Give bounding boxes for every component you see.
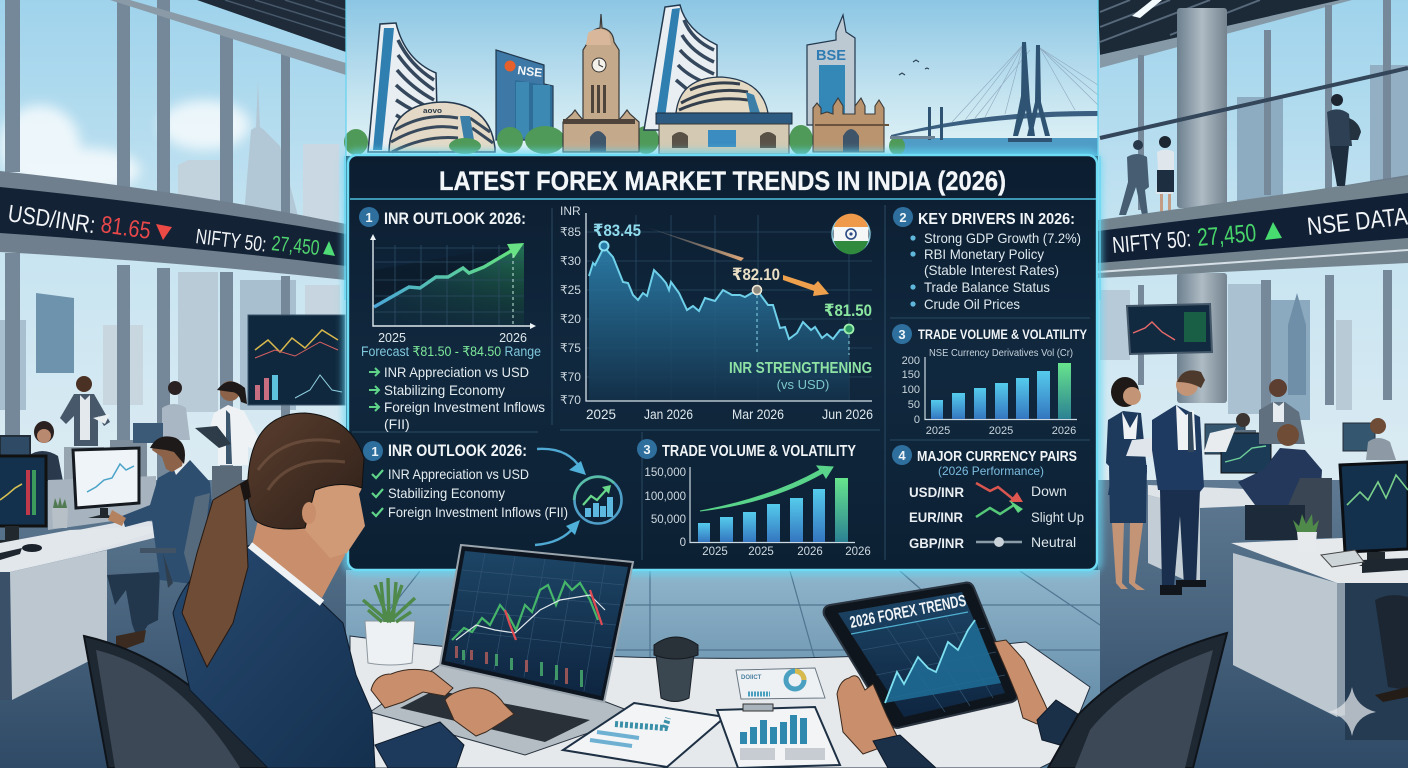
section 2: key drivers: Trade Balance Status — [924, 279, 1050, 295]
section 3: derivatives volume chart: 50 — [908, 399, 920, 411]
main INR price chart: ₹30 — [560, 254, 581, 268]
bottom section 3: trade volume chart: 0 — [680, 537, 686, 549]
left monitor: candlestick — [0, 456, 46, 545]
seated man left — [107, 436, 215, 650]
standing colleague right — [1259, 379, 1305, 444]
center city skyline background — [346, 0, 1098, 156]
price callouts: ₹81.50 — [824, 301, 872, 320]
left ticker band: NIFTY 50: — [194, 225, 268, 257]
section 3: derivatives volume chart: NSE Currency Derivatives Vol (Cr) — [929, 347, 1073, 359]
section 4: major currency pairs — [892, 445, 1084, 551]
front desk left — [0, 497, 178, 700]
bottom section 3: trade volume chart — [637, 439, 871, 558]
price callouts: (vs USD) — [777, 377, 829, 392]
section 4: major currency pairs: (2026 Performance) — [938, 464, 1044, 478]
section 1: INR outlook: 1 — [365, 210, 373, 225]
outlook bullet list: INR Appreciation vs USD — [384, 364, 529, 380]
section 2: key drivers: RBI Monetary Policy — [924, 246, 1044, 262]
landmark: dome left — [389, 102, 495, 152]
landmark: BSE tower — [807, 15, 855, 125]
bottom section 3: trade volume chart: 100,000 — [644, 491, 686, 503]
glass edges — [345, 0, 1100, 300]
right office rear desks — [1148, 413, 1396, 587]
outlook bullet list — [369, 364, 545, 432]
section 3: derivatives volume chart: 2025 — [926, 425, 950, 437]
hands on keyboard — [371, 669, 514, 736]
title: LATEST FOREX MARKET TRENDS IN INDIA (2026) — [439, 166, 1006, 196]
person: upper floor man — [1327, 94, 1361, 186]
bottom section 3: trade volume chart: 150,000 — [644, 467, 686, 479]
section 3: derivatives volume chart: 0 — [914, 414, 920, 426]
businesswoman right — [1106, 377, 1164, 590]
main INR price chart: ₹70 — [560, 393, 581, 407]
price callouts: ₹83.45 — [593, 221, 641, 240]
right ticker band: 27,450 — [1196, 219, 1257, 252]
left ticker band: 27,450 — [270, 232, 321, 260]
section 2: key drivers — [893, 207, 1081, 312]
bottom section 3: trade volume chart: 2025 — [748, 546, 774, 558]
landmark: curved tower left — [368, 23, 438, 152]
section 4: major currency pairs: EUR/INR — [909, 509, 963, 525]
section 3: derivatives volume chart: 3 — [898, 327, 906, 342]
tablet — [824, 583, 1017, 728]
section 3: derivatives volume chart: TRADE VOLUME & VOLATILITY — [918, 327, 1087, 342]
report: donut doc — [736, 668, 825, 699]
wall monitor right — [1127, 304, 1212, 354]
report: bar doc — [563, 703, 725, 767]
right office floor — [1098, 480, 1408, 768]
businessman right — [1152, 370, 1236, 595]
section 4: major currency pairs: MAJOR CURRENCY PAIRS — [917, 448, 1077, 465]
bottom section 1: outlook checklist — [363, 441, 622, 545]
section 3: derivatives volume chart: 200 — [902, 355, 920, 367]
outlook bullet list: (FII) — [384, 416, 410, 432]
desk — [350, 636, 1090, 768]
landmark: clock tower — [563, 14, 639, 152]
price callouts — [593, 221, 872, 392]
main INR price chart — [560, 204, 873, 422]
outlook bullet list: Stabilizing Economy — [384, 382, 505, 398]
right chair — [1048, 633, 1227, 768]
coffee cup — [654, 637, 698, 702]
left ticker band: 81.65 — [99, 211, 152, 245]
main INR price chart: Jun 2026 — [822, 407, 873, 422]
section 3: derivatives volume chart: 2025 — [989, 425, 1013, 437]
bottom section 3: trade volume chart: 50,000 — [651, 514, 686, 526]
section 2: key drivers: (Stable Interest Rates) — [924, 262, 1059, 278]
left ticker band: USD/INR: — [6, 200, 97, 239]
hair — [247, 413, 364, 529]
left chair — [84, 636, 268, 768]
woman at laptop — [173, 413, 514, 768]
main INR price chart: ₹25 — [560, 283, 581, 297]
mini forecast chart — [370, 234, 536, 345]
landmark: Gateway of India — [813, 98, 889, 152]
main INR price chart: Jan 2026 — [644, 407, 693, 422]
center floor — [346, 570, 1100, 768]
hands holding tablet — [837, 640, 1081, 768]
bottom section 3: trade volume chart: 2025 — [702, 546, 728, 558]
icon: growth ring with arrows — [535, 449, 622, 545]
left ticker band — [0, 171, 346, 280]
jacket — [173, 545, 375, 768]
main INR price chart: ₹75 — [560, 341, 581, 355]
main INR price chart: Mar 2026 — [732, 407, 784, 422]
main INR price chart: INR — [560, 204, 581, 218]
outlook bullet list: Foreign Investment Inflows — [384, 399, 545, 415]
bottom section 3: trade volume chart: TRADE VOLUME & VOLATILITY — [662, 443, 856, 460]
landmark: BSE tower: BSE — [816, 47, 846, 64]
section 4: major currency pairs: Neutral — [1031, 534, 1076, 550]
person: upper floor pair — [1119, 136, 1174, 215]
report: clipboard — [717, 704, 840, 768]
section 1: INR outlook: INR OUTLOOK 2026: — [384, 209, 526, 228]
left rear desks — [0, 423, 163, 570]
icon: India flag — [832, 214, 870, 254]
laptop — [370, 545, 640, 755]
mini forecast chart: 2026 — [499, 331, 527, 345]
landmark: NSE tower — [496, 50, 553, 140]
main INR price chart: 2025 — [586, 407, 616, 422]
landmark: NSE tower: NSE — [517, 63, 543, 80]
bottom section 1: outlook checklist: Foreign Investment Inflows (FII) — [388, 504, 568, 520]
left office staff — [28, 376, 260, 498]
report: donut doc: DOIICT — [741, 675, 762, 681]
left office windows — [0, 0, 346, 520]
bottom section 1: outlook checklist: INR Appreciation vs USD — [388, 466, 529, 482]
bottom section 3: trade volume chart: 2026 — [845, 546, 871, 558]
landmark: dome left: aovo — [423, 108, 442, 115]
bottom section 1: outlook checklist: INR OUTLOOK 2026: — [388, 441, 527, 460]
bottom section 3: trade volume chart: 3 — [643, 442, 651, 457]
section 3: derivatives volume chart — [892, 324, 1087, 437]
landmark: sea link bridge — [890, 42, 1098, 142]
main INR price chart: ₹85 — [560, 225, 581, 239]
section 2: key drivers: KEY DRIVERS IN 2026: — [918, 211, 1075, 228]
section 4: major currency pairs: Down — [1031, 483, 1067, 499]
forecast range text: Forecast ₹81.50 - ₹84.50 Range — [361, 344, 541, 359]
bottom section 3: trade volume chart: 2026 — [797, 546, 823, 558]
right ticker band: NIFTY 50: — [1111, 225, 1192, 258]
section 3: derivatives volume chart: 150 — [902, 369, 920, 381]
section 1: INR outlook — [359, 207, 545, 432]
section 2: key drivers: 2 — [899, 210, 907, 225]
right ticker band — [1098, 177, 1408, 278]
watermark sparkle — [1328, 687, 1376, 736]
face — [305, 483, 365, 558]
tablet: 2026 FOREX TRENDS — [848, 592, 968, 632]
left office floor — [0, 480, 350, 768]
wall monitor left — [248, 315, 345, 405]
main dashboard panel — [347, 154, 1098, 571]
landmark: curved tower center — [644, 5, 717, 130]
bottom section 1: outlook checklist: 1 — [371, 444, 379, 459]
section 4: major currency pairs: GBP/INR — [909, 535, 964, 551]
trees — [344, 125, 905, 155]
section 3: derivatives volume chart: 2026 — [1052, 425, 1076, 437]
neck and collar — [252, 490, 345, 598]
right office windows — [1098, 0, 1408, 520]
section 2: key drivers: Crude Oil Prices — [924, 296, 1020, 312]
bottom section 1: outlook checklist: Stabilizing Economy — [388, 485, 505, 501]
right front desk — [1231, 462, 1408, 740]
main INR price chart: ₹70 — [560, 370, 581, 384]
price callouts: INR STRENGTHENING — [729, 360, 872, 377]
landmark: dome center — [656, 77, 792, 154]
plant on desk — [363, 578, 415, 665]
section 2: key drivers: Strong GDP Growth (7.2%) — [924, 230, 1081, 246]
left monitor: light chart — [73, 448, 139, 518]
seated colleague right — [1238, 424, 1332, 540]
section 4: major currency pairs: 4 — [898, 448, 906, 463]
ponytail — [182, 480, 248, 667]
section 3: derivatives volume chart: 100 — [902, 384, 920, 396]
main INR price chart: ₹20 — [560, 312, 581, 326]
price callouts: ₹82.10 — [732, 265, 780, 284]
section 4: major currency pairs: USD/INR — [909, 484, 964, 500]
mini forecast chart: 2025 — [378, 331, 406, 345]
section 4: major currency pairs: Slight Up — [1031, 509, 1084, 525]
